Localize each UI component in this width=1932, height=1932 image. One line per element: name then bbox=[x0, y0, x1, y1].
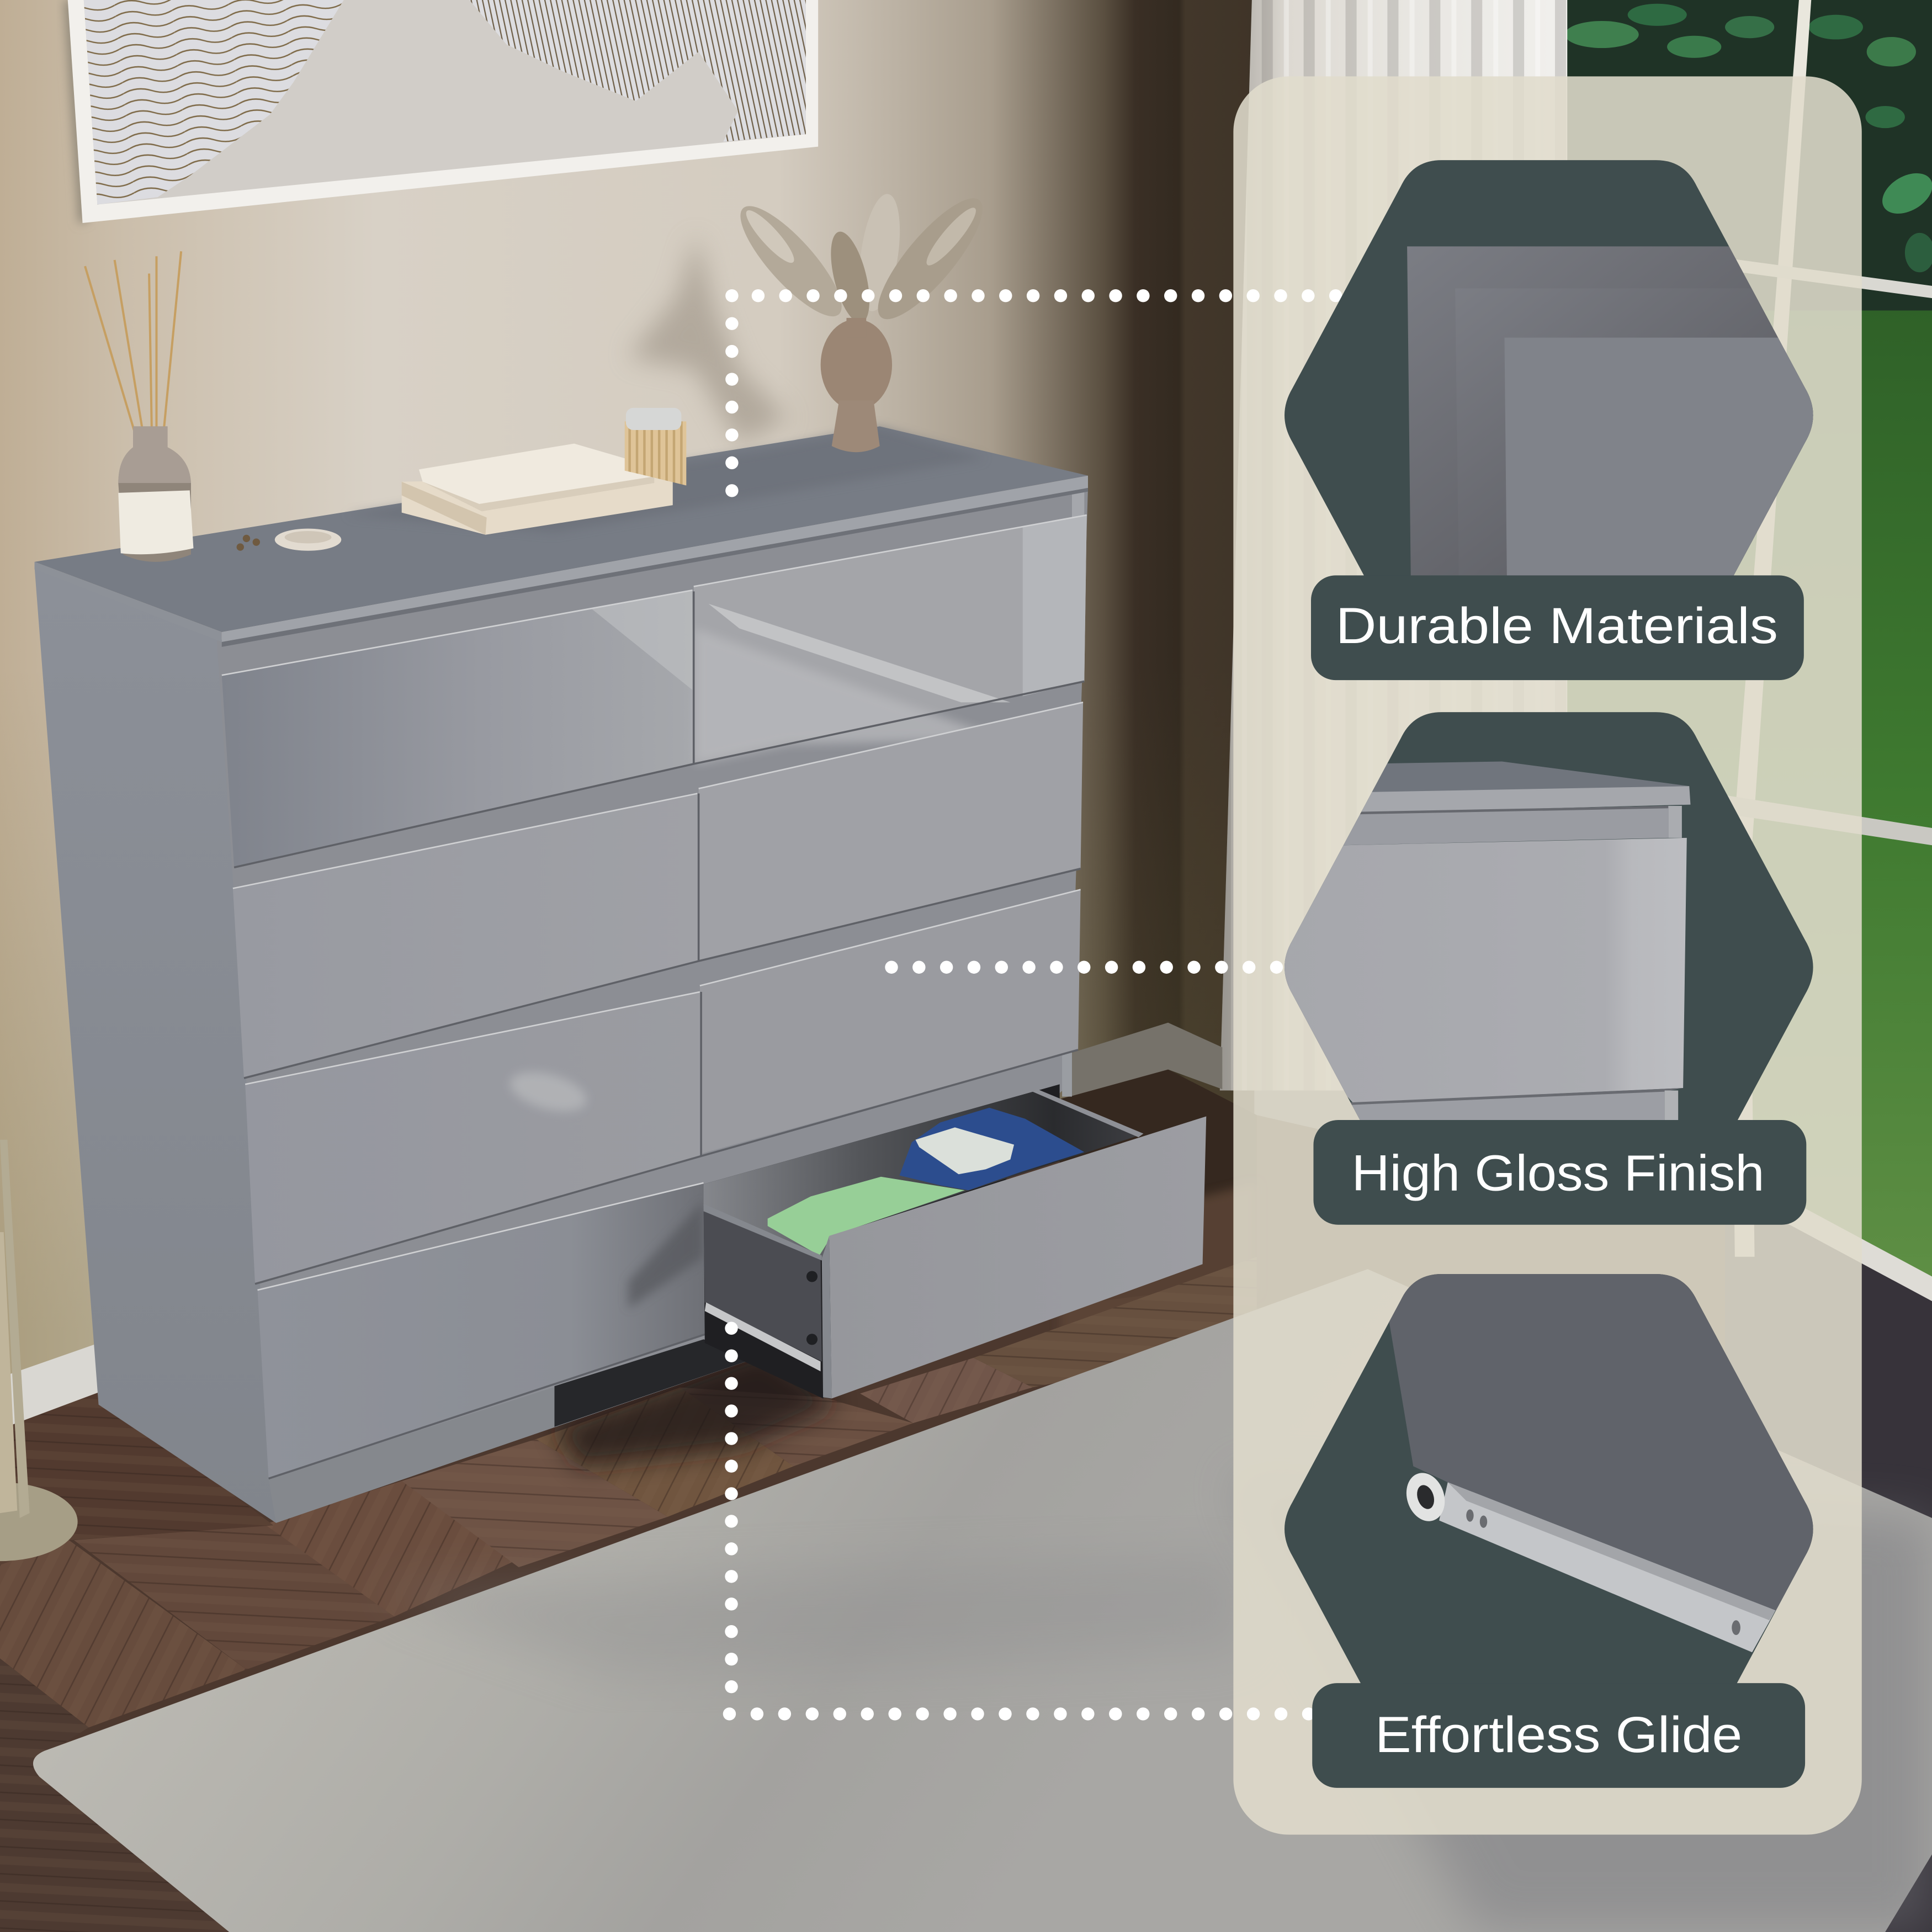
baseboards bbox=[0, 1023, 1222, 1429]
gloss drawer closeup bbox=[1285, 762, 1690, 1120]
window with garden view bbox=[1479, 0, 1932, 1301]
wall shadow of plant bbox=[628, 234, 789, 444]
dresser top bbox=[34, 426, 1088, 647]
dresser body bbox=[34, 488, 1088, 1523]
trinket dish and rings bbox=[237, 529, 341, 551]
drawer: second left bbox=[233, 794, 699, 1078]
label box bbox=[1312, 1683, 1805, 1788]
floor: dark parquet bbox=[0, 1070, 1932, 1932]
open drawer with clothes bbox=[704, 1084, 1206, 1398]
drawer shadow lines bbox=[234, 591, 1084, 1479]
candle bbox=[625, 408, 686, 485]
label: High Gloss Finish bbox=[1352, 1145, 1764, 1201]
white garment bbox=[915, 1127, 1014, 1174]
reed diffuser bbox=[85, 251, 193, 562]
drawer: top left bbox=[222, 590, 694, 867]
closed drawer fronts bbox=[222, 515, 1087, 1479]
label: Effortless Glide bbox=[1375, 1707, 1742, 1763]
feature: high gloss finish bbox=[1232, 712, 1813, 1225]
drawer side panel bbox=[704, 1209, 822, 1362]
drawer right rail bbox=[1033, 1089, 1143, 1137]
drawer interior bbox=[704, 1090, 1141, 1258]
feature: effortless glide bbox=[1285, 1269, 1836, 1788]
feature: durable materials bbox=[1285, 160, 1824, 680]
wall art bbox=[64, 0, 818, 224]
drawer: third right bbox=[700, 890, 1081, 1153]
hexagon bbox=[1285, 160, 1813, 670]
drawer: top right bbox=[694, 515, 1087, 764]
label box bbox=[1311, 575, 1804, 680]
layered board sample bbox=[1407, 246, 1824, 579]
drawer top edge bbox=[704, 1204, 822, 1260]
rug shadows bbox=[370, 1479, 1932, 1932]
drawer screws bbox=[806, 1271, 818, 1345]
drawer cavity shadow bbox=[704, 1084, 1060, 1398]
stacked books bbox=[402, 444, 673, 535]
translucent features panel bbox=[1233, 76, 1862, 1835]
drawer slide bbox=[705, 1302, 821, 1371]
label box bbox=[1313, 1120, 1806, 1225]
green garment bbox=[768, 1177, 965, 1256]
dotted connector: materials bbox=[731, 296, 1336, 493]
hexagon bbox=[1285, 712, 1813, 1222]
drawer edge highlights bbox=[222, 515, 1087, 1290]
dotted connector: gloss bbox=[890, 964, 1276, 970]
curtain bbox=[1220, 0, 1567, 1090]
drawer front bbox=[829, 1116, 1206, 1398]
dotted connector: glide bbox=[729, 1328, 1310, 1714]
drawer: third left bbox=[245, 992, 702, 1284]
drawer: bottom left bbox=[258, 1183, 705, 1479]
drawer: second right bbox=[699, 702, 1083, 961]
label: Durable Materials bbox=[1336, 598, 1778, 654]
floor lamp bbox=[0, 1140, 78, 1561]
vase with pampas bbox=[727, 185, 997, 452]
hexagon bbox=[1285, 1274, 1813, 1784]
drawer runner closeup bbox=[1368, 1269, 1836, 1652]
blue garment bbox=[899, 1108, 1084, 1190]
rug bbox=[33, 1269, 1932, 1932]
drawer front edge bbox=[822, 1236, 832, 1398]
background: wall bbox=[0, 0, 1254, 1479]
